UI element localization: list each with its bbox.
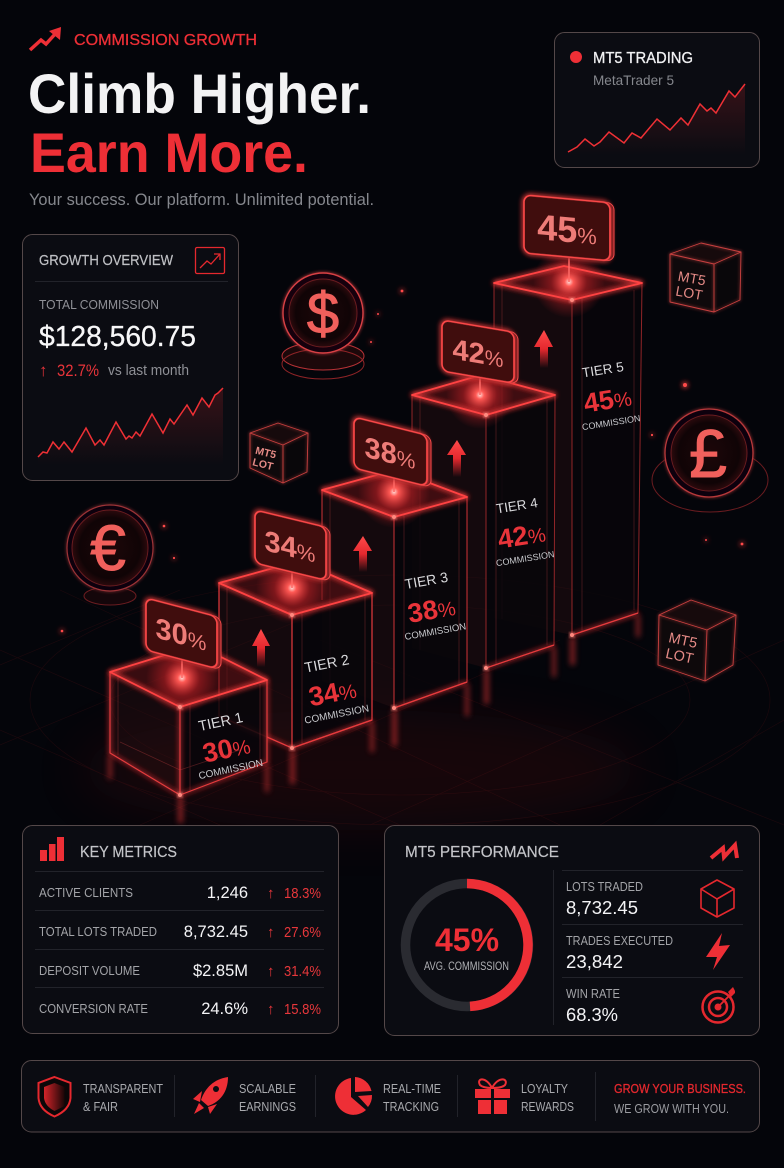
donut label: AVG. COMMISSION [424,959,509,973]
cube: MT5 lot upper right: LOT [674,283,704,303]
tier text [187,708,264,782]
header: eyebrow [30,27,257,50]
badge [524,195,614,282]
icon: pound coin: £ [689,416,727,492]
stat: lots traded: LOTS TRADED [566,879,643,894]
row: active clients: 18.3% [284,885,321,902]
tier text: COMMISSION [304,703,370,727]
growth change [39,361,189,380]
tier text: COMMISSION [404,621,467,643]
panel heading: MT5 TRADING [593,50,693,67]
row: deposit volume: ↑ [267,963,274,980]
badge [255,510,330,588]
arrow [447,440,466,477]
title [28,62,371,184]
growth change: vs last month [108,363,189,379]
tier 4 column [412,320,555,670]
tier text: TIER 5 [581,359,625,381]
badge [146,598,221,678]
badge [354,417,431,492]
row: conversion rate: CONVERSION RATE [39,1001,148,1016]
badge: 30% [156,612,206,658]
row: total lots traded [39,923,321,941]
donut chart [406,884,528,1006]
call to action [614,1081,746,1116]
tier text: TIER 1 [197,710,245,735]
panel subheading: MetaTrader 5 [593,72,674,88]
tier text: TIER 3 [403,569,449,592]
stat: trades executed [566,933,673,972]
tier 2 column [219,510,372,750]
row: conversion rate: 15.8% [284,1001,321,1018]
badge: 45% [537,206,597,253]
call to action: WE GROW WITH YOU. [614,1101,729,1116]
panel: key metrics [22,826,338,1034]
line chart [568,84,745,155]
tagline: Your success. Our platform. Unlimited potential. [29,190,374,209]
icon: euro coin [67,505,153,605]
cube: MT5 lot upper right [670,243,741,312]
icon: pound coin [652,409,768,512]
total commission value: $128,560.75 [39,321,196,353]
row: deposit volume [39,962,321,980]
tier text [573,358,641,432]
tier text: 34% [306,674,359,712]
row: active clients: ACTIVE CLIENTS [39,885,133,900]
icon: growth arrow [30,27,61,50]
benefit: real-time tracking [383,1081,441,1114]
row: active clients: 1,246 [207,884,248,902]
tier text: 30% [200,729,253,769]
cube: MT5 lot lower right [658,600,736,681]
row: total lots traded: TOTAL LOTS TRADED [39,924,157,939]
tier text: 38% [405,591,458,629]
tier 3 column [322,417,467,710]
tier text: TIER 4 [495,495,539,517]
row: active clients [39,884,321,902]
benefit: scalable earnings [239,1081,296,1114]
badge: 42% [453,334,504,374]
icon: lightning bolt [706,933,730,970]
cube: MT5 lot lower right: MT5 [667,630,699,652]
badge: 38% [365,431,416,476]
row: active clients: ↑ [267,885,274,902]
stat: trades executed: 23,842 [566,952,623,972]
arrow [353,536,372,572]
growth change: 32.7% [57,361,99,380]
panel: MT5 trading [554,32,760,168]
benefit: scalable earnings: SCALABLE [239,1081,296,1096]
icon: shield [38,1077,70,1116]
benefit: real-time tracking: TRACKING [383,1099,439,1114]
cube: MT5 lot middle: LOT [251,456,275,473]
tier text [394,567,467,643]
row: total lots traded: 27.6% [284,924,321,941]
row: deposit volume: 31.4% [284,963,321,980]
icon: rocket [193,1077,228,1114]
icon: dollar coin [282,273,364,379]
stat: trades executed: TRADES EXECUTED [566,933,673,948]
benefit: transparent and fair: & FAIR [83,1099,118,1114]
cube: MT5 lot upper right: MT5 [677,268,707,288]
particles [61,290,743,632]
benefit: real-time tracking: REAL-TIME [383,1081,441,1096]
floor reflections [108,615,640,823]
panel heading: MT5 PERFORMANCE [405,844,559,861]
panel: benefits strip [22,1060,760,1132]
tier 1 column [110,598,267,797]
benefit: loyalty rewards: REWARDS [521,1099,574,1114]
icon: chart [196,248,224,274]
line chart [38,388,223,465]
panel: growth overview [22,234,238,480]
row: total lots traded: 8,732.45 [184,923,248,941]
tier text: 45% [582,381,634,419]
panel: MT5 performance [384,826,760,1036]
status dot [570,51,582,63]
benefit: transparent and fair [83,1081,163,1114]
growth change: ↑ [39,361,48,380]
tier text [487,494,555,568]
tier text: COMMISSION [581,413,641,432]
floor grid [0,575,784,825]
stat: lots traded [566,879,643,918]
benefit: loyalty rewards [521,1081,574,1114]
tier text: COMMISSION [198,758,264,782]
benefit: transparent and fair: TRANSPARENT [83,1081,163,1096]
icon: target [702,987,735,1022]
cube: MT5 lot lower right: LOT [664,646,695,668]
icon: M logo [711,845,737,858]
icon: euro coin: € [90,512,126,584]
donut value: 45% [435,922,499,958]
icon: dollar coin: $ [307,281,339,346]
stat: win rate [566,986,620,1025]
row: total lots traded: ↑ [267,924,274,941]
row: conversion rate: 24.6% [201,1000,248,1018]
stat: lots traded: 8,732.45 [566,898,638,918]
row: conversion rate: ↑ [267,1001,274,1018]
icon: cube [701,880,734,917]
arrow [534,330,553,368]
badge: 34% [265,525,316,570]
row: conversion rate [39,1000,321,1018]
cube: MT5 lot middle: MT5 [254,445,278,461]
row: deposit volume: DEPOSIT VOLUME [39,963,140,978]
row: deposit volume: $2.85M [193,962,248,980]
icon: pie chart [335,1077,372,1115]
eyebrow text: COMMISSION GROWTH [74,32,257,49]
tier text: COMMISSION [495,549,555,568]
tier text [293,650,370,727]
stat: win rate: WIN RATE [566,986,620,1001]
badge [442,320,518,395]
tier 5 column [494,195,642,637]
icon: bars [40,837,64,861]
title: Climb Higher. [28,62,371,125]
tier text: TIER 2 [303,652,351,677]
tier text: 42% [496,517,548,555]
benefit: scalable earnings: EARNINGS [239,1099,296,1114]
call to action: GROW YOUR BUSINESS. [614,1081,746,1096]
title: Earn More. [30,121,308,184]
benefit: loyalty rewards: LOYALTY [521,1081,568,1096]
panel heading: KEY METRICS [80,844,177,861]
cube: MT5 lot middle [250,423,308,483]
stat: win rate: 68.3% [566,1005,618,1025]
icon: gift [475,1079,510,1114]
total commission label: TOTAL COMMISSION [39,297,159,312]
panel heading: GROWTH OVERVIEW [39,253,173,269]
arrow [252,629,270,667]
